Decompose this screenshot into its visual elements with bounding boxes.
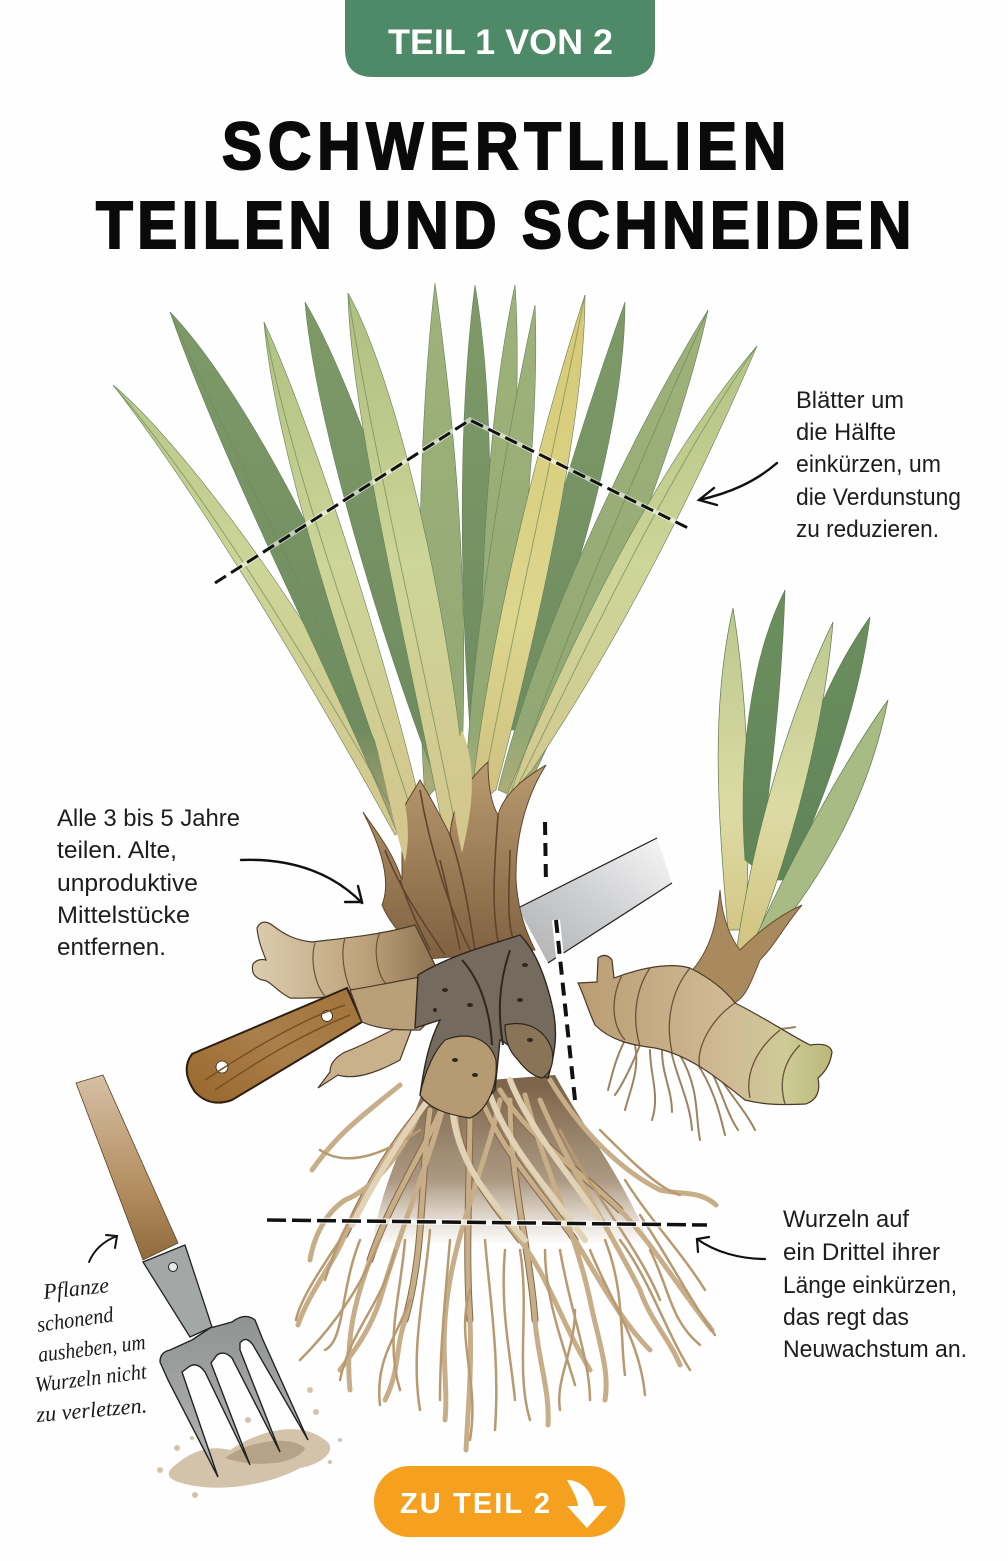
dashed cut line: rhizome: [545, 822, 575, 1100]
leaf bases over the stem: [375, 740, 408, 862]
title: [96, 108, 911, 263]
text: handwritten fork note: ausheben, um: [37, 1329, 147, 1367]
text: handwritten fork note: schonend: [35, 1301, 116, 1337]
illustration: split-off rhizome: [578, 955, 832, 1105]
illustration: split-off plant roots: [608, 1027, 795, 1140]
text: roots note: ein Drittel ihrer: [783, 1239, 940, 1266]
arrow: divide note: [241, 860, 362, 903]
illustration: soil: [157, 1387, 342, 1498]
illustration: garden fork: [76, 1075, 308, 1477]
ferrule rivet: [168, 1262, 178, 1272]
illustration: split-off plant leaves: [718, 590, 888, 960]
button: zu Teil 2: ZU TEIL 2: [400, 1488, 550, 1520]
text: divide note: [57, 805, 240, 961]
banner: Teil 1 von 2: TEIL 1 VON 2: [388, 23, 613, 62]
fork head: [160, 1316, 308, 1477]
text: roots note: Neuwachstum an.: [783, 1336, 967, 1363]
text: divide note: entfernen.: [57, 934, 166, 961]
arrow: fork note: [89, 1235, 117, 1262]
illustration: split-off plant stem base: [688, 890, 802, 1005]
text: divide note: teilen. Alte,: [57, 837, 177, 864]
icon: curved arrow down: [567, 1480, 607, 1528]
illustration: upper left rhizome: [252, 922, 440, 998]
text: roots note: das regt das: [783, 1304, 909, 1331]
text: handwritten fork note: Wurzeln nicht: [34, 1358, 149, 1397]
text: leaves note: zu reduzieren.: [796, 516, 939, 543]
dashed cut line: leaves: [215, 420, 688, 583]
text: leaves note: einkürzen, um: [796, 451, 941, 478]
text: leaves note: die Hälfte: [796, 419, 896, 446]
text: leaves note: [796, 387, 961, 543]
title: TEILEN UND SCHNEIDEN: [96, 187, 911, 263]
text: divide note: Mittelstücke: [57, 902, 190, 929]
illustration: central rhizomes: [350, 935, 555, 1118]
dashed cut line: roots: [267, 1220, 707, 1225]
illustration: knife blade: [518, 838, 672, 963]
text: leaves note: Blätter um: [796, 387, 904, 414]
illustration: lower left knob: [318, 1020, 415, 1088]
text: roots note: Wurzeln auf: [783, 1206, 909, 1233]
illustration: main stem base: [363, 730, 546, 960]
title: SCHWERTLILIEN: [222, 108, 786, 184]
illustration: root system: [296, 1075, 716, 1450]
text: handwritten fork note: [34, 1272, 149, 1427]
text: divide note: unproduktive: [57, 870, 198, 897]
button: zu Teil 2: [374, 1466, 625, 1537]
text: roots note: Länge einkürzen,: [783, 1272, 957, 1299]
illustration: main plant leaves: [113, 283, 757, 850]
fork ferrule: [143, 1245, 212, 1337]
text: roots note: [783, 1206, 967, 1363]
arrow: roots note: [697, 1237, 765, 1259]
banner: Teil 1 von 2: [345, 0, 655, 77]
text: handwritten fork note: Pflanze: [41, 1272, 110, 1304]
text: handwritten fork note: zu verletzen.: [34, 1392, 148, 1427]
text: leaves note: die Verdunstung: [796, 484, 961, 511]
text: divide note: Alle 3 bis 5 Jahre: [57, 805, 240, 832]
arrow: leaves note: [699, 463, 777, 505]
fork handle: [76, 1075, 178, 1260]
illustration: knife handle: [187, 988, 362, 1103]
